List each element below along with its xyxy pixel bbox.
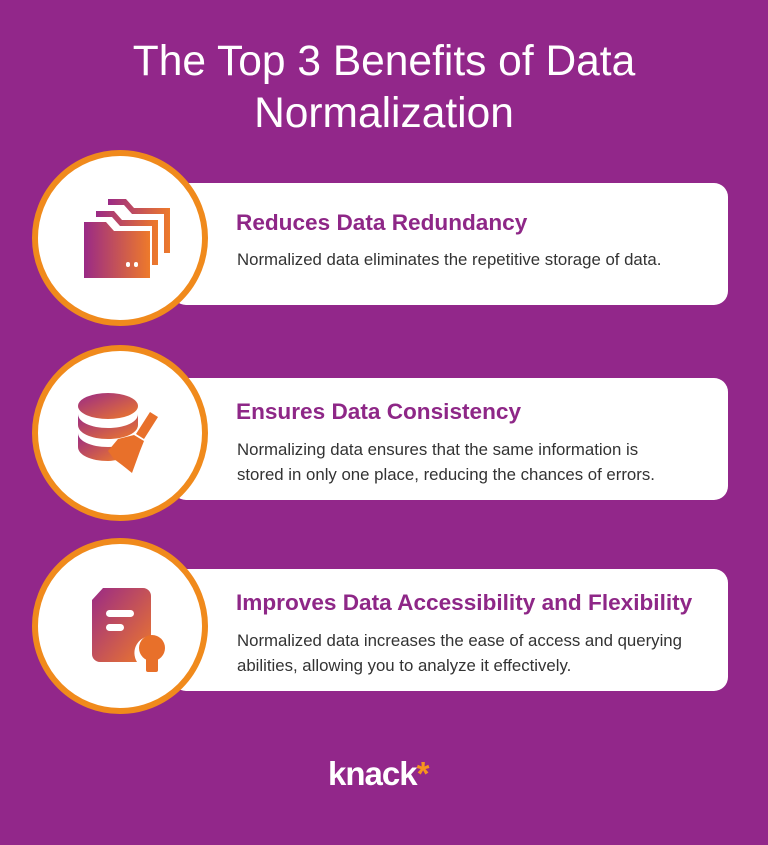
circle icon: database broom bbox=[32, 345, 208, 521]
text 3 bbox=[237, 631, 682, 675]
text 3: abilities, allowing you to analyze it effectively. bbox=[237, 656, 571, 675]
circle icon: locked document bbox=[32, 538, 208, 714]
text 3: Normalized data increases the ease of access and querying bbox=[237, 631, 682, 650]
heading 2: Ensures Data Consistency bbox=[236, 399, 521, 424]
text 2: Normalizing data ensures that the same information is bbox=[237, 440, 638, 459]
card 3 bbox=[172, 569, 728, 691]
card 1 bbox=[172, 183, 728, 305]
text 2 bbox=[237, 440, 655, 484]
text 2: stored in only one place, reducing the chances of errors. bbox=[237, 465, 655, 484]
heading 1: Reduces Data Redundancy bbox=[236, 210, 527, 235]
title: The Top 3 Benefits of Data bbox=[133, 38, 635, 85]
title bbox=[133, 38, 636, 137]
text 1: Normalized data eliminates the repetitive storage of data. bbox=[237, 250, 661, 269]
heading 3: Improves Data Accessibility and Flexibility bbox=[236, 590, 692, 615]
circle icon: folders bbox=[32, 150, 208, 326]
logo: knack* bbox=[328, 755, 428, 792]
card 2 bbox=[172, 378, 728, 500]
title: Normalization bbox=[254, 90, 514, 137]
